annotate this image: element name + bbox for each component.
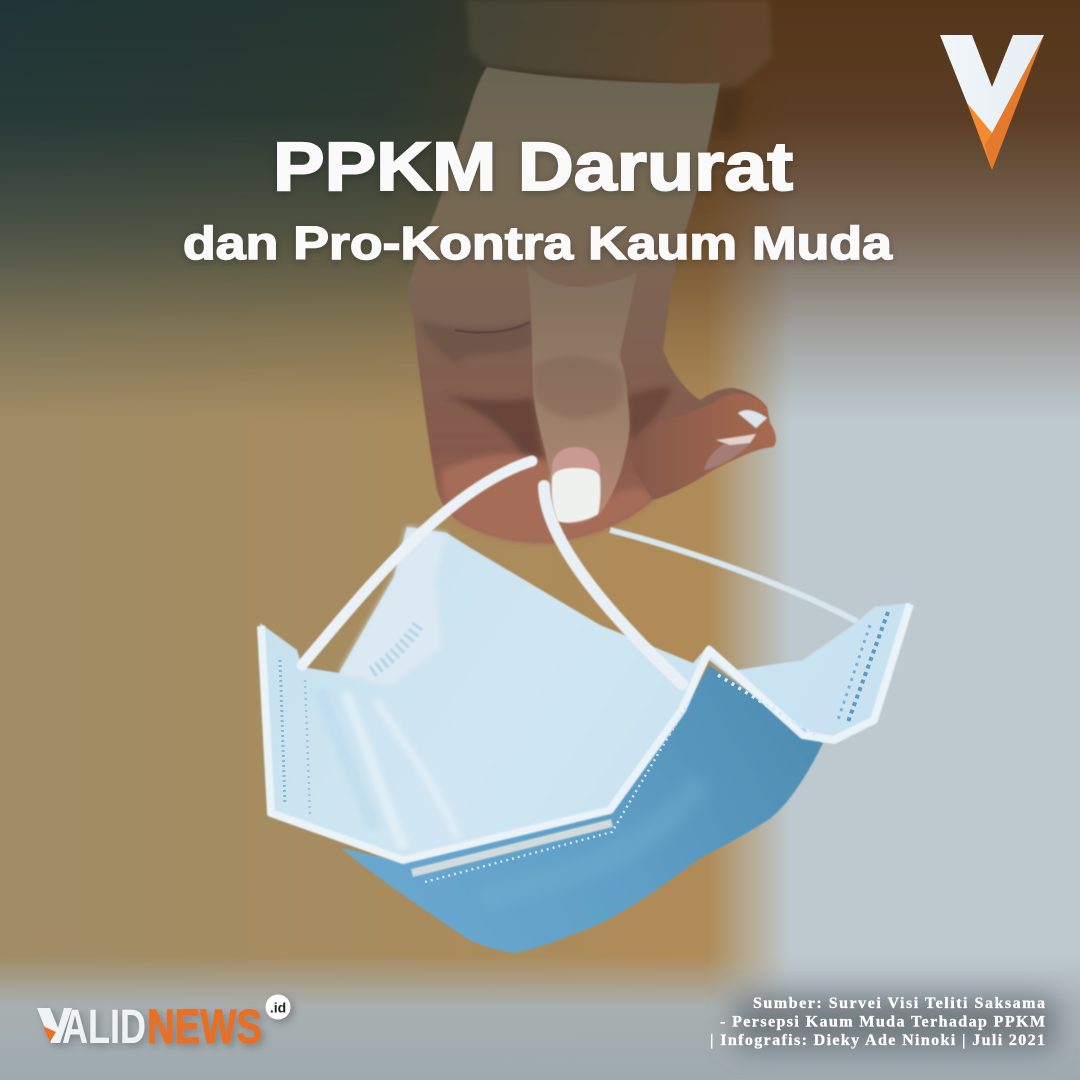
source credits (710, 995, 1045, 1049)
ear loops in front (302, 461, 682, 684)
logo V (37, 1008, 72, 1043)
badge .id (266, 994, 290, 1020)
mask far ear loop (610, 530, 858, 622)
mask fabric mottling (480, 780, 700, 900)
palm shade (418, 318, 533, 365)
mask folds (345, 692, 405, 848)
photo: hand holding mask (260, 0, 911, 953)
mask (260, 527, 911, 953)
index finger (442, 454, 653, 543)
logo: VALIDNEWS.id (37, 994, 290, 1054)
source credits: | Infografis: Dieky Ade Ninoki | Juli 2021 (710, 1032, 1045, 1049)
nail (552, 447, 600, 523)
mask outer blue face (341, 665, 823, 953)
wordmark: ALID (62, 1001, 146, 1054)
mask right pleat (848, 612, 888, 722)
mask cream band (412, 823, 612, 873)
mask stitches (425, 700, 690, 882)
mask front white rim (261, 604, 910, 860)
thumb (527, 262, 637, 523)
title (183, 128, 892, 269)
hand (408, 67, 776, 543)
sleeve (466, 0, 772, 88)
title line 2: dan Pro-Kontra Kaum Muda (183, 217, 892, 269)
credits shadow (735, 997, 1055, 1049)
wordmark: NEWS (147, 1001, 262, 1054)
title line 1: PPKM Darurat (273, 128, 793, 205)
other fingers (628, 394, 776, 500)
logo: VALIDNEWS.id: .id (270, 1000, 286, 1016)
other finger nails (704, 434, 756, 470)
source credits: Sumber: Survei Visi Teliti Saksama (753, 995, 1045, 1012)
logo: V mark (940, 35, 1044, 170)
source credits: - Persepsi Kaum Muda Terhadap PPKM (720, 1014, 1045, 1030)
mask left pleat (280, 660, 285, 805)
mask back left strip (339, 527, 447, 687)
mask inner (260, 527, 911, 857)
